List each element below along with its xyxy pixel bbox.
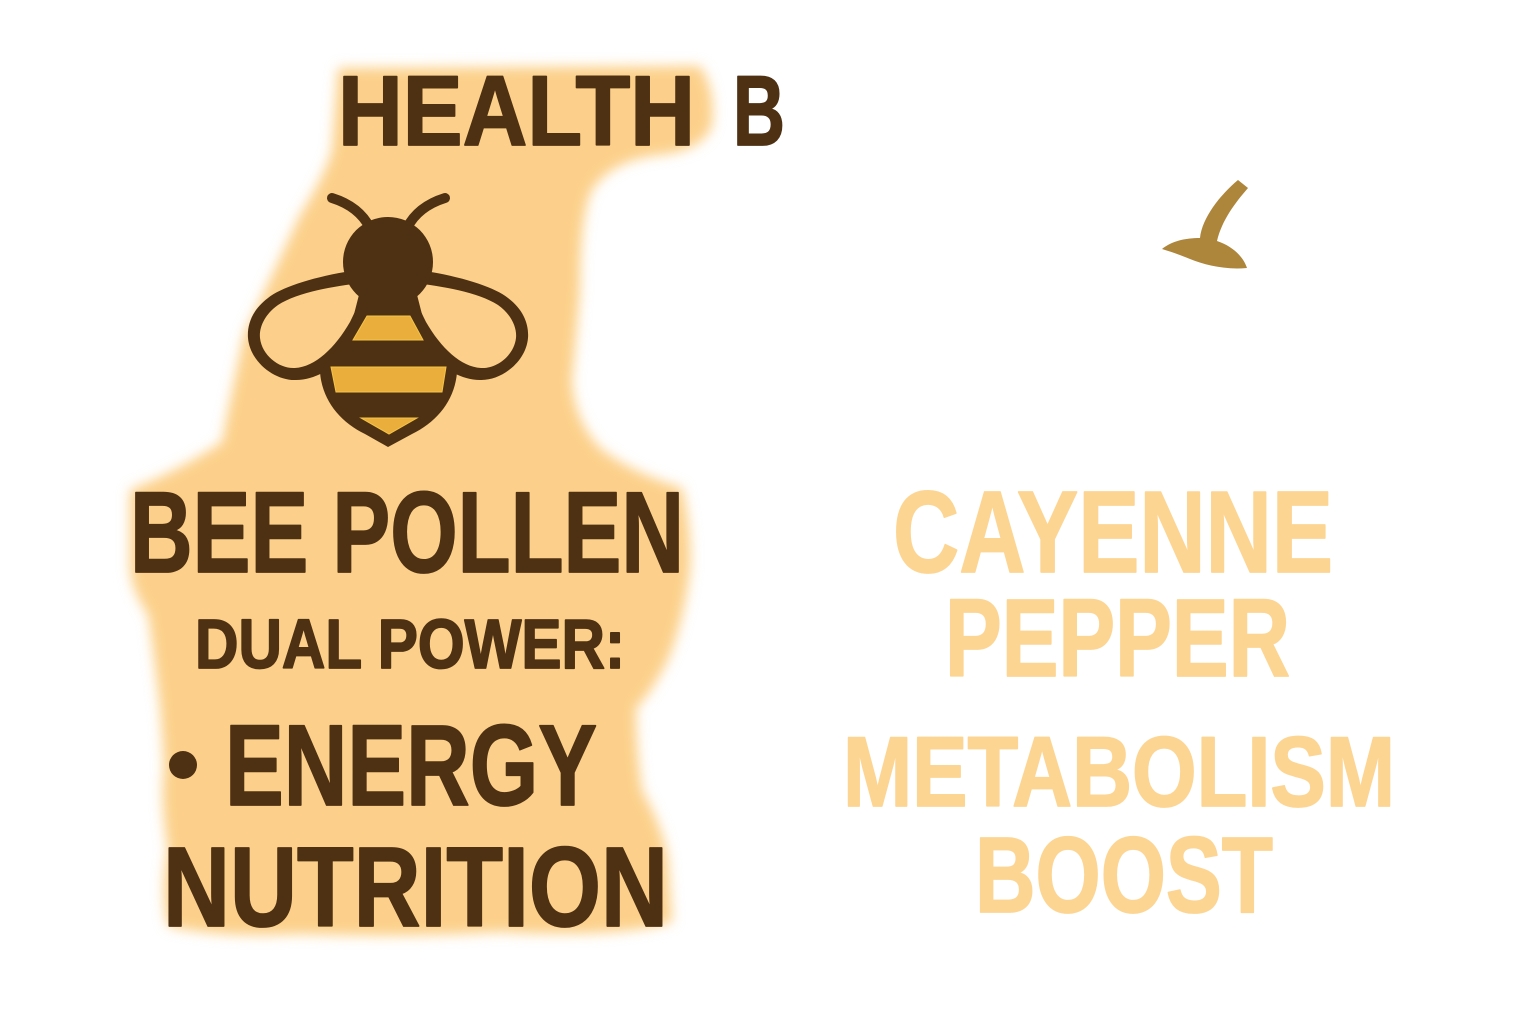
- bullet: energy nutrition: [163, 702, 668, 950]
- panel: bee pollen peach background: [130, 66, 713, 936]
- bee stripes: [331, 316, 446, 434]
- text: metabolism boost: BOOST: [975, 814, 1273, 935]
- bee head: [343, 217, 433, 307]
- bee right wing: [404, 272, 528, 380]
- bullet dot: [169, 751, 197, 779]
- heading: cayenne pepper: CAYENNE: [893, 467, 1333, 597]
- heading: cayenne pepper: PEPPER: [945, 577, 1290, 700]
- bee antennae: [332, 198, 445, 228]
- heading: cayenne pepper: [893, 467, 1333, 700]
- nutrition label: NUTRITION: [163, 824, 668, 950]
- icon: pepper stem: [1162, 180, 1248, 268]
- energy label: ENERGY: [225, 702, 597, 830]
- bee left wing: [248, 272, 372, 380]
- heading: bee pollen: BEE POLLEN: [130, 469, 684, 597]
- bee body: [320, 283, 457, 447]
- subheading: dual power: DUAL POWER:: [195, 605, 625, 683]
- text: metabolism boost: METABOLISM: [843, 716, 1395, 827]
- heading: health b: B: [733, 55, 785, 166]
- icon: bee: [248, 198, 528, 447]
- text: metabolism boost: [843, 716, 1395, 935]
- heading: health b: HEALTH: [338, 55, 695, 166]
